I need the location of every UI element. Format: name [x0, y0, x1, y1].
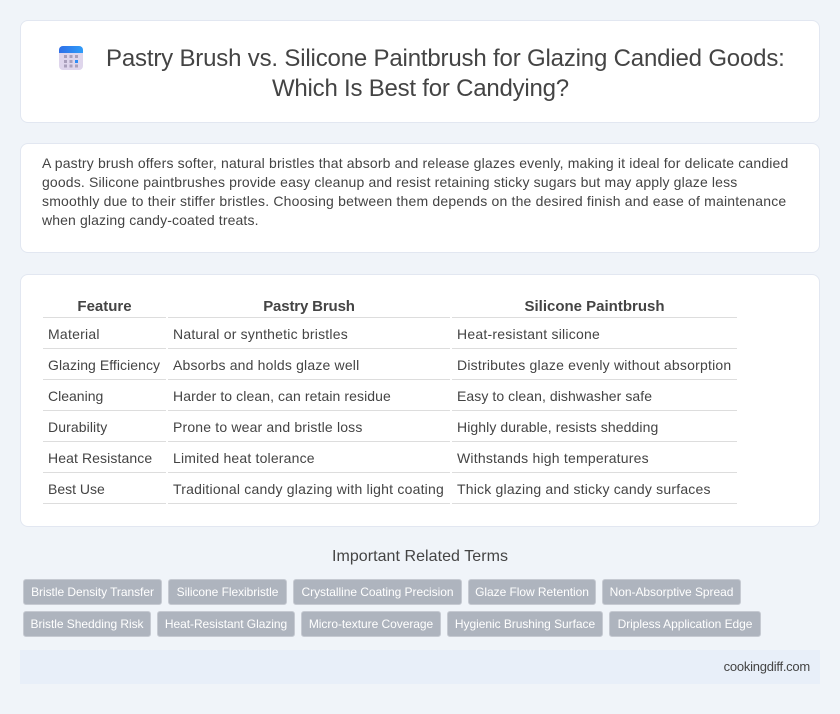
title panel — [20, 20, 820, 123]
title text: Which Is Best for Candying? — [272, 75, 569, 102]
title text — [106, 45, 785, 102]
row: glazing efficiency: Distributes glaze evenly without absorption — [457, 357, 731, 373]
row: glazing efficiency: Absorbs and holds glaze well — [173, 357, 359, 373]
row: heat resistance: Withstands high temperatures — [457, 450, 649, 466]
footer — [20, 650, 820, 684]
title text: Pastry Brush vs. Silicone Paintbrush for Glazing Candied Goods: — [106, 45, 785, 72]
footer site name: cookingdiff.com — [724, 659, 810, 674]
row: durability: Durability — [48, 419, 107, 435]
row: heat resistance: Limited heat tolerance — [173, 450, 315, 466]
related term tags: Dripless Application Edge — [618, 617, 752, 631]
row: durability — [48, 419, 658, 435]
related term tags: Bristle Shedding Risk — [30, 617, 144, 631]
intro text: goods. Silicone paintbrushes provide easy cleanup and resist retaining sticky sugars but may apply glaze less — [42, 174, 737, 190]
row: glazing efficiency: Glazing Efficiency — [48, 357, 160, 373]
related term tags — [23, 579, 761, 637]
table header: Feature — [77, 298, 132, 315]
intro text — [42, 155, 788, 228]
related term tags: Non-Absorptive Spread — [610, 585, 733, 599]
row: heat resistance: Heat Resistance — [48, 450, 152, 466]
row: best use: Best Use — [48, 481, 105, 497]
row: durability: Highly durable, resists shedding — [457, 419, 658, 435]
table panel — [20, 274, 820, 527]
related term tags: Bristle Density Transfer — [31, 585, 154, 599]
comparison table — [43, 298, 737, 504]
related term tags: Micro-texture Coverage — [309, 617, 433, 631]
intro text: smoothly due to their stiffer bristles. Choosing between them depends on the desired finish and ease of maintenance — [42, 193, 786, 209]
table header: Pastry Brush — [263, 298, 355, 315]
row: material — [48, 326, 600, 342]
row: durability: Prone to wear and bristle loss — [173, 419, 363, 435]
row: material: Material — [48, 326, 100, 342]
row: cleaning: Cleaning — [48, 388, 103, 404]
icon: calendar — [59, 46, 83, 70]
row: cleaning: Easy to clean, dishwasher safe — [457, 388, 652, 404]
related term tags: Silicone Flexibristle — [177, 585, 278, 599]
intro text: A pastry brush offers softer, natural bristles that absorb and release glazes evenly, making it ideal for delicate candied — [42, 155, 788, 171]
row: material: Natural or synthetic bristles — [173, 326, 348, 342]
related terms heading: Important Related Terms — [332, 548, 508, 565]
row: best use: Thick glazing and sticky candy surfaces — [457, 481, 711, 497]
row: cleaning: Harder to clean, can retain residue — [173, 388, 391, 404]
row: cleaning — [48, 388, 652, 404]
intro panel — [20, 143, 820, 253]
related term tags: Hygienic Brushing Surface — [455, 617, 595, 631]
intro text: when glazing candy-coated treats. — [42, 212, 259, 228]
row: glazing efficiency — [48, 357, 731, 373]
related term tags: Glaze Flow Retention — [475, 585, 589, 599]
row: best use — [48, 481, 711, 497]
related term tags: Heat-Resistant Glazing — [165, 617, 287, 631]
table header — [77, 298, 665, 315]
table header: Silicone Paintbrush — [524, 298, 665, 315]
row: best use: Traditional candy glazing with light coating — [173, 481, 444, 497]
related term tags: Crystalline Coating Precision — [302, 585, 453, 599]
row: material: Heat-resistant silicone — [457, 326, 600, 342]
row: heat resistance — [48, 450, 649, 466]
